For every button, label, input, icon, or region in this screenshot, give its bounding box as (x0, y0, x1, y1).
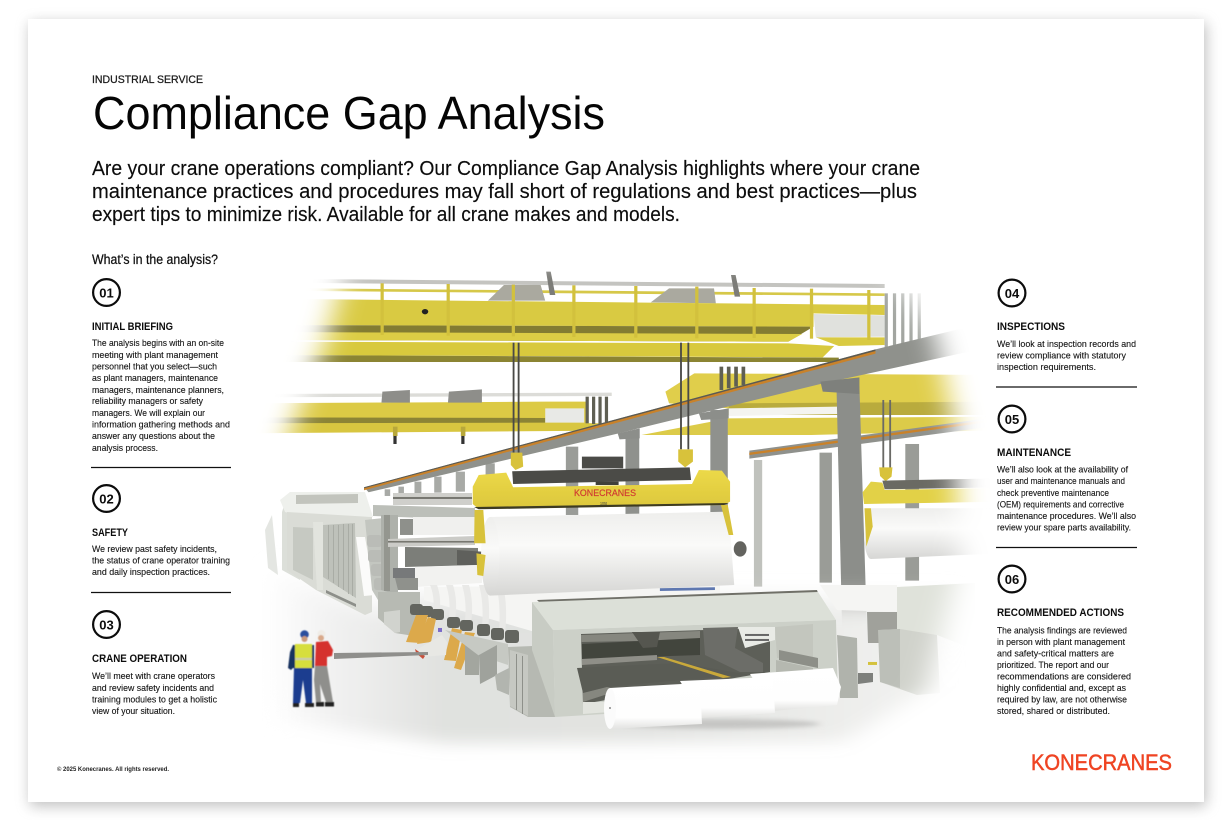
body 06: in person with plant management (997, 636, 1125, 647)
body 01: managers. We will explain our (92, 407, 205, 418)
body 05: We’ll also look at the availability of (997, 464, 1128, 474)
finished paper rolls in front (604, 668, 841, 729)
step 05 (997, 406, 1136, 532)
body 01: managers, maintenance planners, (92, 384, 224, 395)
heading 03: CRANE OPERATION (92, 653, 187, 665)
body 04: inspection requirements. (997, 361, 1096, 372)
front paper machine unit and rolls (508, 590, 841, 729)
intro paragraph (92, 157, 920, 226)
crane hoist cables and hooks (511, 343, 892, 481)
body 03: training modules to get a holistic (92, 694, 217, 704)
badge 04: 04 (1005, 286, 1020, 301)
badge 01 (93, 279, 120, 306)
section heading: What’s in the analysis? (92, 252, 218, 267)
left utility box (508, 646, 555, 717)
heading 02: SAFETY (92, 527, 128, 539)
step 02 (92, 485, 230, 577)
worker in safety vest (288, 630, 314, 707)
body 05: review your spare parts availability. (997, 522, 1131, 532)
body 02 (92, 543, 230, 577)
body 01: as plant managers, maintenance (92, 372, 218, 383)
body 01: information gathering methods and (92, 418, 230, 430)
spreader capacity label: 105t (600, 501, 608, 506)
machine housing (532, 590, 838, 717)
body 06: and safety-critical matters are (997, 648, 1114, 658)
body 01: The analysis begins with an on-site (92, 337, 224, 348)
body 03 (92, 670, 217, 716)
second overhead crane on the left (247, 389, 612, 444)
intro paragraph: Are your crane operations compliant? Our Compliance Gap Analysis highlights where your crane (92, 157, 920, 180)
body 02: We review past safety incidents, (92, 543, 217, 554)
badge 06 (999, 566, 1025, 592)
intro paragraph: expert tips to minimize risk. Available for all crane makes and models. (92, 203, 680, 226)
body 05: maintenance procedures. We’ll also (997, 510, 1136, 521)
heading 04: INSPECTIONS (997, 321, 1065, 333)
body 05 (997, 464, 1136, 532)
body 06: recommendations are considered (997, 670, 1131, 682)
body 01 (92, 337, 230, 453)
step 03 (92, 611, 217, 716)
body 01: answer any questions about the (92, 430, 215, 441)
machine base blocks (334, 630, 509, 695)
body 03: view of your situation. (92, 705, 175, 716)
body 02: and daily inspection practices. (92, 566, 210, 577)
shadow under rolls (620, 719, 820, 729)
copyright: © 2025 Konecranes. All rights reserved. (57, 765, 169, 773)
roll bearings row (410, 604, 519, 643)
body 06: The analysis findings are reviewed (997, 624, 1127, 636)
body 06: required by law, are not otherwise (997, 694, 1127, 704)
body 05: (OEM) requirements and corrective (997, 498, 1124, 510)
gantry columns behind the rail (385, 410, 919, 587)
body 01: analysis process. (92, 442, 158, 453)
main paper roll (474, 505, 747, 596)
heading 06: RECOMMENDED ACTIONS (997, 607, 1124, 619)
body 04: We’ll look at inspection records and (997, 338, 1136, 349)
right spreader and roll (862, 479, 980, 559)
heading 01: INITIAL BRIEFING (92, 321, 173, 333)
row of white paper rolls (424, 585, 720, 633)
body 01: personnel that you select—such (92, 360, 217, 372)
badge 06: 06 (1005, 572, 1019, 587)
body 05: check preventive maintenance (997, 487, 1109, 498)
badge 03: 03 (99, 618, 114, 632)
body 04 (997, 338, 1136, 372)
front steel column (820, 377, 869, 683)
body 01: reliability managers or safety (92, 395, 203, 406)
title: Compliance Gap Analysis (93, 87, 605, 139)
eyebrow label: INDUSTRIAL SERVICE (92, 74, 203, 86)
factory floor (304, 584, 938, 748)
body 03: and review safety incidents and (92, 682, 214, 693)
step 01 (92, 279, 230, 453)
tan sleeves and sled (406, 615, 475, 670)
body 03: We’ll meet with crane operators (92, 670, 215, 681)
badge 05: 05 (1005, 412, 1019, 427)
far crane on the right (642, 367, 1004, 435)
paper machine on the left (265, 492, 487, 637)
lower scene in page coordinates (265, 492, 964, 748)
diagonal gantry rail (364, 332, 958, 492)
worker in red jacket (314, 630, 334, 706)
right background machinery (820, 583, 975, 698)
main overhead crane at the top (261, 272, 921, 362)
Konecranes logo: KONECRANES (1031, 750, 1172, 775)
body 06: prioritized. The report and our (997, 659, 1109, 670)
workers in hi-vis gear (288, 630, 334, 707)
heading 05: MAINTENANCE (997, 447, 1071, 459)
step 04 (997, 280, 1136, 372)
second gantry rail (749, 421, 970, 459)
body 01: meeting with plant management (92, 349, 218, 360)
illustration: paper mill with overhead cranes (265, 272, 980, 748)
body 06 (997, 624, 1131, 716)
body 04: review compliance with statutory (997, 350, 1126, 360)
lifting beam spreader (473, 457, 730, 509)
body 06: highly confidential and, except as (997, 682, 1126, 693)
badge 02: 02 (99, 492, 114, 506)
body 02: the status of crane operator training (92, 554, 230, 566)
step 06 (997, 566, 1131, 716)
spreader logo text: KONECRANES (574, 488, 636, 499)
body 06: stored, shared or distributed. (997, 705, 1110, 716)
body 05: user and maintenance manuals and (997, 475, 1125, 486)
intro paragraph: maintenance practices and procedures may fall short of regulations and best practices—plus (92, 180, 917, 203)
badge 01: 01 (99, 286, 114, 300)
